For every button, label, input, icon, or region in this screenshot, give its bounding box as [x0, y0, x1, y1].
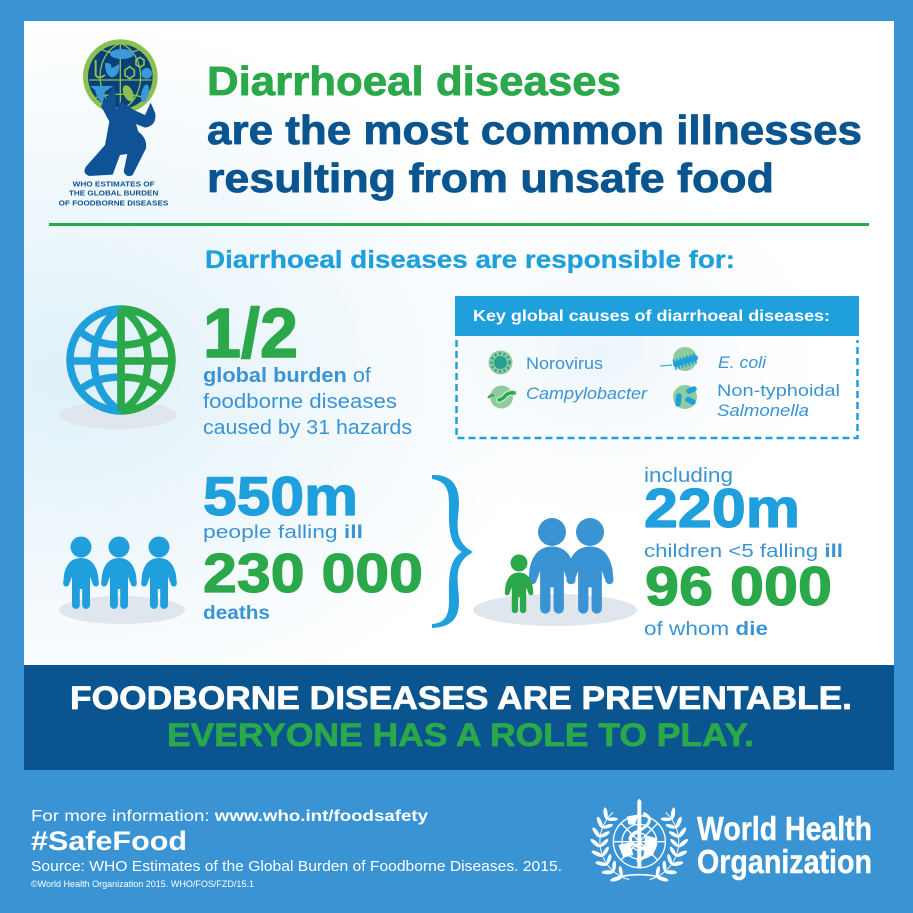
- logo caption: THE GLOBAL BURDEN: [69, 191, 158, 198]
- white content panel: [24, 21, 894, 665]
- footer text: #SafeFood: [31, 826, 187, 856]
- stat: one half: caused by 31 hazards: [203, 417, 412, 439]
- stat: children: of whom die: [644, 619, 768, 640]
- footer text: [31, 808, 562, 889]
- subheading: Diarrhoeal diseases are responsible for:: [205, 246, 735, 274]
- icon: e. coli: [660, 347, 697, 371]
- label: salmonella: Salmonella: [717, 401, 809, 420]
- label: salmonella: [717, 381, 840, 420]
- icon: norovirus: [488, 350, 512, 374]
- stat: children: including: [644, 465, 733, 487]
- stat: one half: [203, 294, 412, 439]
- stat: one half: global burden of: [203, 365, 371, 387]
- stat: all people: 550m: [203, 465, 358, 527]
- logo caption: WHO ESTIMATES OF: [73, 181, 156, 188]
- title: Diarrhoeal diseases: [207, 58, 621, 104]
- footer text: For more information: www.who.int/foodsafety: [31, 808, 428, 825]
- brace: [432, 475, 473, 628]
- label: salmonella: Non-typhoidal: [717, 381, 840, 400]
- footer text: Source: WHO Estimates of the Global Burden of Foodborne Diseases. 2015.: [31, 858, 562, 875]
- stat: all people: [203, 465, 423, 624]
- stat: all people: deaths: [203, 603, 270, 624]
- WHO emblem: [589, 799, 689, 887]
- WHO estimates logo: [59, 39, 169, 207]
- stat: children: 96 000: [645, 555, 832, 617]
- banner: prevention message: EVERYONE HAS A ROLE TO PLAY.: [167, 717, 754, 753]
- stat: one half: foodborne diseases: [203, 391, 397, 413]
- logo figure: [84, 85, 155, 176]
- icon: split globe: [59, 309, 177, 429]
- WHO wordmark: [697, 810, 872, 880]
- label: norovirus: Norovirus: [526, 354, 603, 373]
- title: [207, 58, 862, 201]
- icon: family: [473, 518, 637, 626]
- logo globe: [83, 39, 158, 114]
- banner: prevention message: [24, 665, 894, 770]
- WHO wordmark: Organization: [697, 843, 872, 880]
- label: campylobacter: Campylobacter: [526, 384, 648, 403]
- title: resulting from unsafe food: [207, 155, 774, 201]
- logo caption: [59, 181, 169, 207]
- stat: children: children <5 falling ill: [644, 541, 843, 561]
- icon: salmonella: [673, 385, 697, 409]
- icon: campylobacter: [488, 386, 514, 408]
- stat: children: [644, 465, 843, 640]
- stat: all people: 230 000: [203, 542, 423, 604]
- title: are the most common illnesses: [207, 107, 862, 153]
- panel: key global causes: [455, 296, 859, 438]
- panel: key global causes: Key global causes of diarrhoeal diseases:: [473, 308, 830, 325]
- stat: one half: 1/2: [203, 294, 298, 372]
- label: e. coli: E. coli: [718, 353, 767, 372]
- stat: all people: people falling ill: [203, 522, 363, 542]
- footer text: ©World Health Organization 2015. WHO/FOS/FZD/15.1: [31, 879, 254, 889]
- banner: prevention message: FOODBORNE DISEASES ARE PREVENTABLE.: [70, 680, 852, 716]
- logo caption: OF FOODBORNE DISEASES: [59, 200, 169, 207]
- icon: three people: [59, 536, 185, 624]
- stat: children: 220m: [644, 477, 800, 539]
- WHO wordmark: World Health: [697, 810, 872, 847]
